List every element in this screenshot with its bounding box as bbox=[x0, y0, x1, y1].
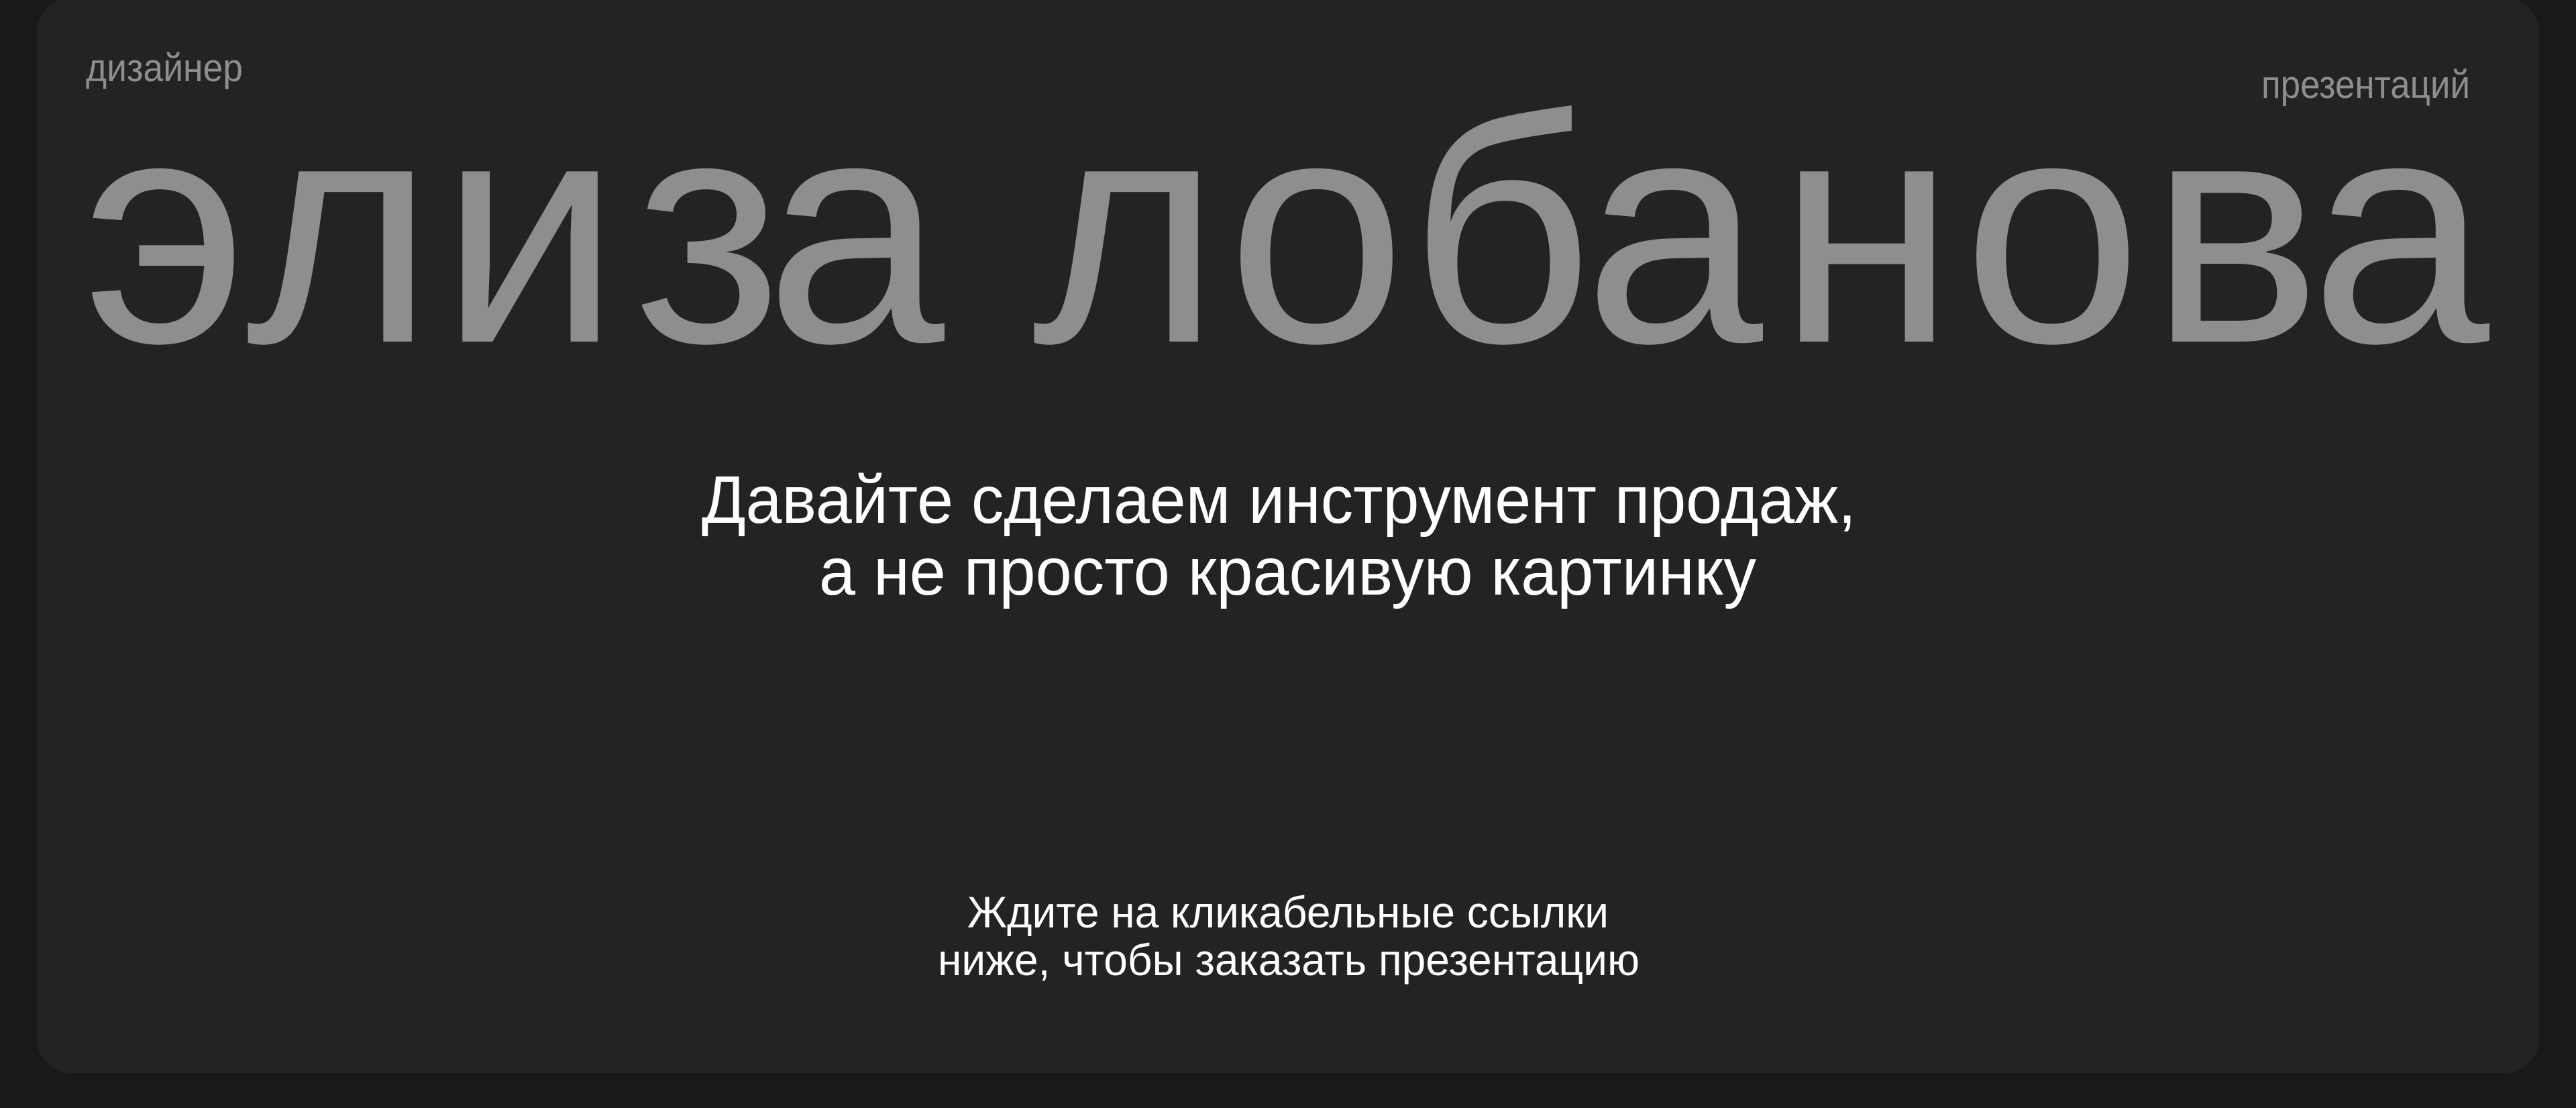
headline line 1: Давайте сделаем инструмент продаж, bbox=[702, 462, 1856, 538]
headline bbox=[702, 462, 1856, 609]
call to action line 1: Ждите на кликабельные ссылки bbox=[967, 887, 1609, 937]
call to action line 2: ниже, чтобы заказать презентацию bbox=[938, 935, 1640, 985]
call to action bbox=[938, 887, 1640, 985]
label: designer: дизайнер bbox=[86, 46, 243, 90]
title: name bbox=[83, 50, 2491, 410]
title word: first name: элиза bbox=[83, 50, 947, 410]
title word: last name: лобанова bbox=[1032, 50, 2491, 410]
label: presentations: презентаций bbox=[2261, 63, 2470, 107]
headline line 2: а не просто красивую картинку bbox=[819, 534, 1756, 609]
